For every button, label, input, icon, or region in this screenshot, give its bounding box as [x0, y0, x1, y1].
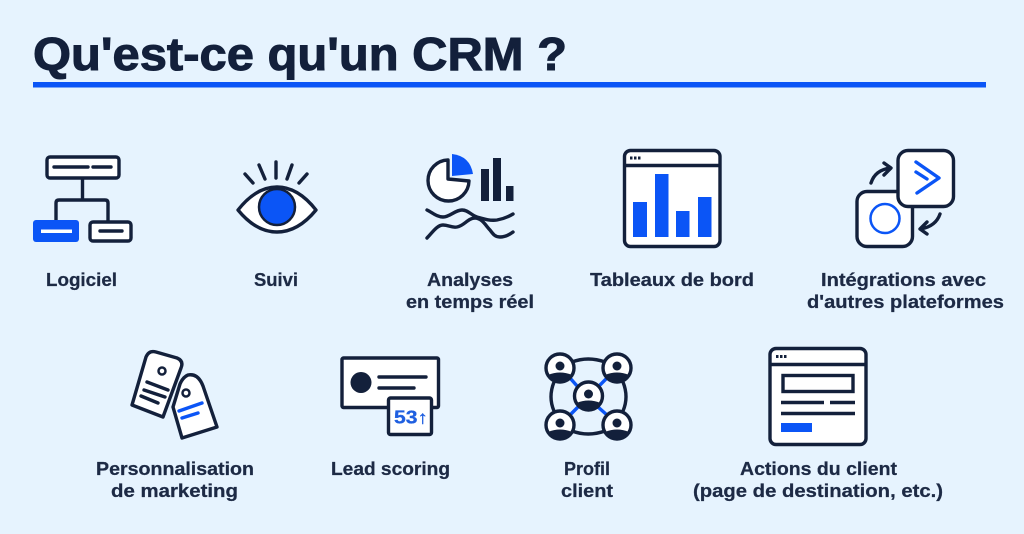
- icon: eye: [238, 162, 316, 232]
- panel: Intégrations: [807, 150, 1004, 312]
- label: en temps réel: en temps réel: [406, 292, 534, 312]
- label: Actions du client: Actions du client: [740, 459, 897, 479]
- label: Profil: Profil: [564, 459, 610, 479]
- label: d'autres plateformes: d'autres plateformes: [807, 292, 1004, 312]
- panel: Profil client: [546, 354, 631, 501]
- icon: integrations: [857, 150, 954, 246]
- label: Tableaux de bord: Tableaux de bord: [590, 270, 754, 290]
- label: page de destination: (page de destination, etc.): [693, 481, 943, 501]
- label: client: client: [561, 481, 613, 501]
- icon: charts and waves: [427, 154, 514, 238]
- panel: Personnalisation de marketing: [96, 352, 254, 501]
- panel: Lead scoring: [331, 358, 450, 479]
- panel: Analyses en temps réel: [406, 154, 534, 312]
- label: Lead scoring: Lead scoring: [331, 459, 450, 479]
- score number: 53↑: [394, 408, 428, 428]
- icon: org chart: [33, 157, 131, 242]
- panel: Suivi: [238, 162, 316, 290]
- label: Personnalisation: Personnalisation: [96, 459, 254, 479]
- panel: Tableaux de bord: [590, 150, 754, 290]
- label: Analyses: Analyses: [427, 270, 513, 290]
- title: Qu'est-ce qu'un CRM ?: [33, 28, 567, 80]
- icon: tags: [132, 352, 217, 438]
- label: Logiciel: Logiciel: [46, 270, 117, 290]
- label: de marketing: de marketing: [111, 481, 238, 501]
- label: Suivi: Suivi: [254, 270, 298, 290]
- icon: network of people: [546, 354, 631, 439]
- panel: Logiciel: [33, 157, 131, 290]
- title underline: [33, 82, 986, 88]
- panel: Actions du client: [693, 348, 943, 501]
- icon: dashboard window: [624, 150, 720, 246]
- label: Intégrations avec: Intégrations avec: [821, 270, 986, 290]
- icon: landing page window: [770, 348, 866, 444]
